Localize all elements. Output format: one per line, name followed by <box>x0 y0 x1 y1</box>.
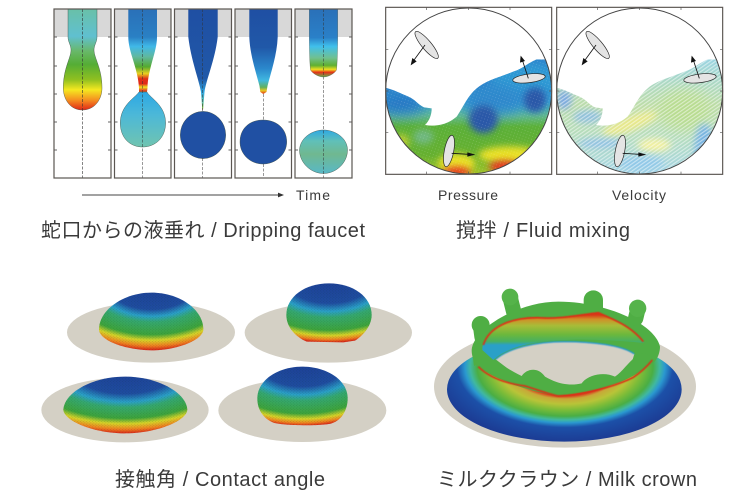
substrate plate <box>434 326 696 448</box>
panel: milk crown <box>434 289 696 448</box>
caption: milk crown: ミルククラウン / Milk crown <box>437 468 697 491</box>
arrow: time axis <box>82 193 284 197</box>
label: pressure: Pressure <box>438 187 498 203</box>
inner edge fringe <box>496 342 634 359</box>
faucet frame 2 <box>114 9 171 178</box>
impeller blades <box>582 29 717 168</box>
crown centre opening <box>496 342 634 391</box>
panel: fluid mixing <box>373 7 728 203</box>
red front rim line <box>478 360 652 396</box>
crown front rim band <box>478 353 653 396</box>
splash disc <box>447 337 682 442</box>
caption: dripping faucet: 蛇口からの液垂れ / Dripping faucet <box>41 219 365 242</box>
panel: contact angle droplets <box>41 283 412 442</box>
faucet frame 5 <box>295 9 352 178</box>
label: velocity: Velocity <box>612 187 666 203</box>
impeller blades <box>411 29 546 168</box>
droplet top right <box>245 283 412 363</box>
axis label: time: Time <box>296 187 330 203</box>
droplet bottom right <box>218 367 386 442</box>
caption: contact angle: 接触角 / Contact angle <box>115 468 325 491</box>
faucet frame 3 <box>174 9 232 178</box>
red back rim line <box>483 313 643 345</box>
panel: dripping faucet <box>54 9 352 203</box>
droplet top left <box>67 293 235 363</box>
crown inner wall <box>482 313 644 360</box>
faucet frame 1 <box>54 9 111 178</box>
crown back rim and spikes <box>472 289 660 370</box>
crown front wall <box>474 358 654 416</box>
caption: fluid mixing: 撹拌 / Fluid mixing <box>456 219 630 242</box>
droplet bottom left <box>41 377 209 442</box>
pressure chart <box>385 6 552 175</box>
velocity chart <box>551 7 728 177</box>
faucet frame 4 <box>235 9 292 178</box>
